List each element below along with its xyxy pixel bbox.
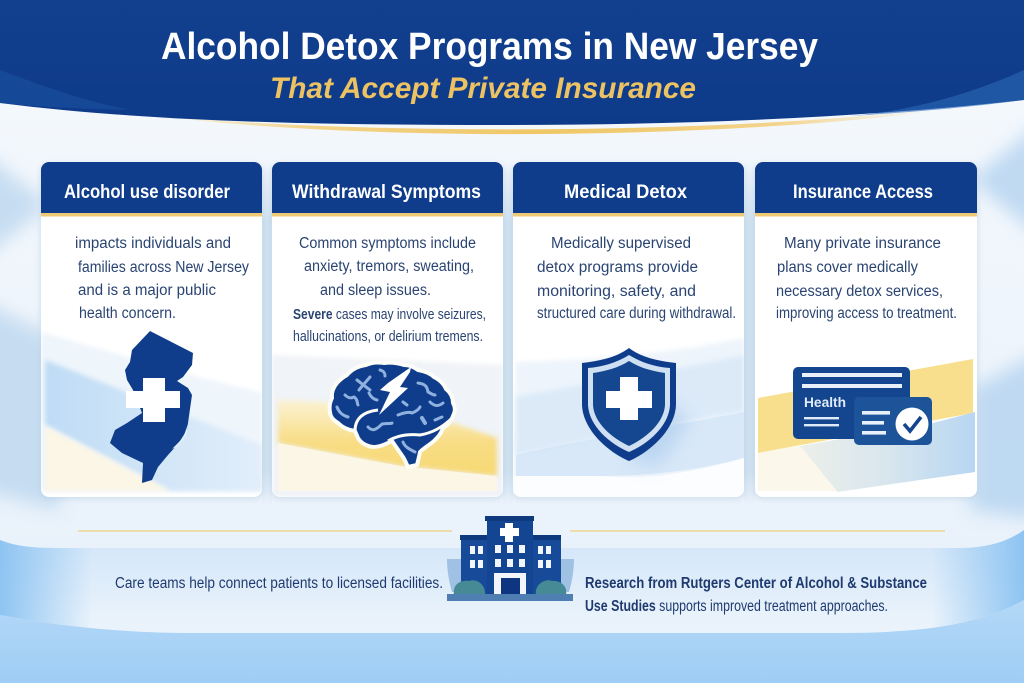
card body text [537,235,736,322]
card body text: families across New Jersey [78,259,249,276]
card header [41,162,262,216]
card body text: hallucinations, or delirium tremens. [293,329,483,345]
card heading: Insurance Access [793,182,933,203]
card body text: Common symptoms include [299,235,476,252]
icon: health insurance card with check: Health [804,394,846,410]
card body text [75,235,249,322]
card header [755,162,977,216]
card body text: Severe cases may involve seizures, [293,307,486,323]
card body text: monitoring, safety, and [537,283,696,300]
panel: alcohol use disorder [40,162,263,499]
header gold swoosh [150,110,930,134]
card body text: structured care during withdrawal. [537,305,736,322]
icon: hospital building [447,516,574,601]
card body text: Many private insurance [784,235,941,252]
card body text: plans cover medically [777,259,918,276]
card body text: impacts individuals and [75,235,231,252]
card body text [776,235,957,322]
card header [272,162,503,216]
card body text: detox programs provide [537,259,698,276]
card body text: and is a major public [78,282,216,299]
panel: withdrawal symptoms [271,162,504,499]
card header [513,162,744,216]
footer text right [585,575,927,615]
header banner [0,0,1024,125]
footer text right: Research from Rutgers Center of Alcohol & Substance [585,575,927,592]
icon: brain with lightning bolt [330,362,455,467]
card body text: anxiety, tremors, sweating, [304,258,474,275]
card body text: Medically supervised [551,235,691,252]
footer text left: Care teams help connect patients to licensed facilities. [115,575,443,592]
footer band [0,530,1024,683]
icon: health insurance card with check [793,367,932,445]
subtitle: That Accept Private Insurance [270,72,696,105]
card body text [293,235,486,345]
panel: insurance access [754,162,978,499]
divider lines [78,530,945,532]
card body text: improving access to treatment. [776,305,957,322]
title: Alcohol Detox Programs in New Jersey [161,26,818,68]
card heading: Withdrawal Symptoms [292,182,481,203]
icon: New Jersey map with cross [110,331,193,483]
card body text: and sleep issues. [320,282,431,299]
card heading: Alcohol use disorder [64,182,231,203]
card heading: Medical Detox [564,182,687,203]
card body text: necessary detox services, [776,283,943,300]
panel: medical detox [512,162,745,499]
icon: shield with cross [582,348,690,465]
footer text right: Use Studies supports improved treatment approaches. [585,598,888,615]
card body text: health concern. [79,305,176,322]
